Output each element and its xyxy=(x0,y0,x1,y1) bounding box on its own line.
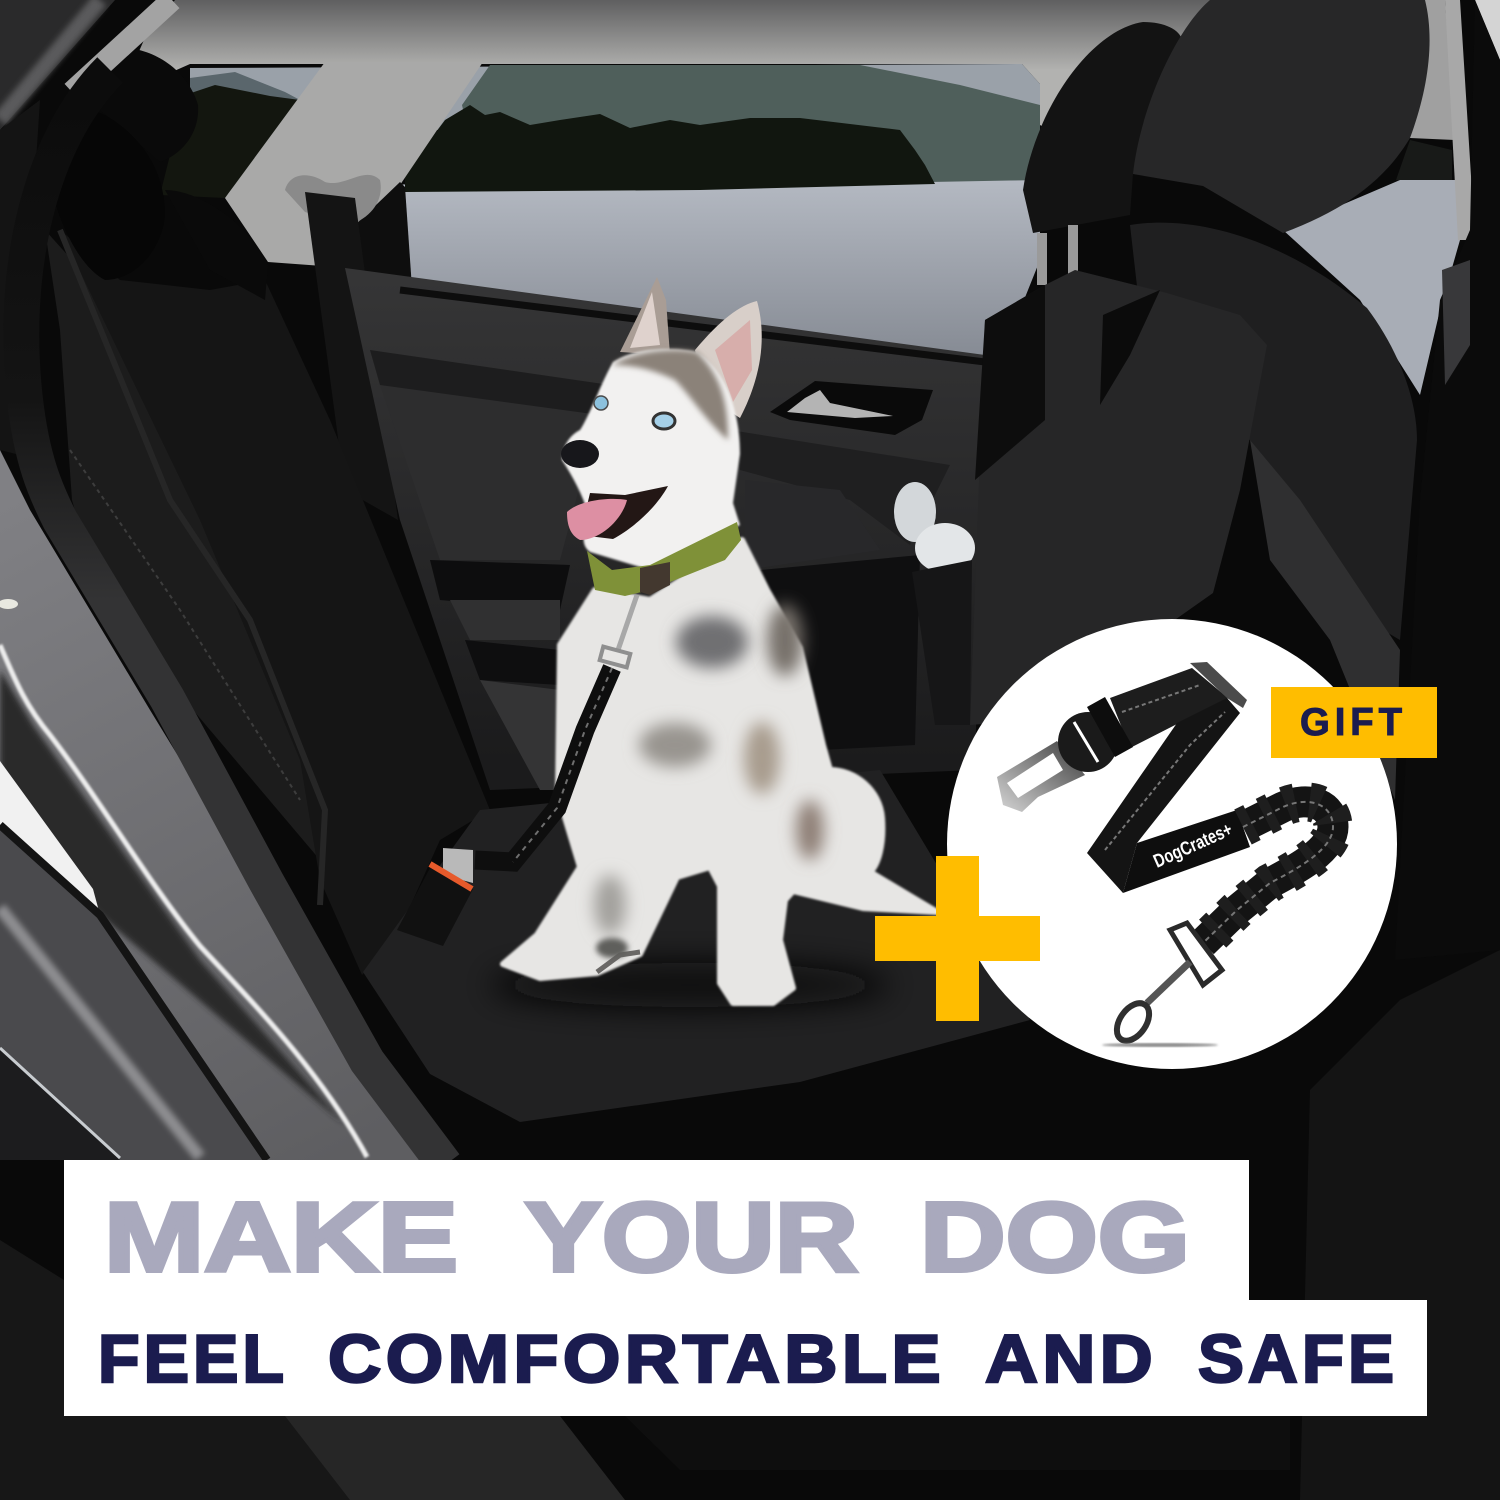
mouth xyxy=(580,486,668,539)
clip slot xyxy=(1074,722,1098,762)
right ear inner xyxy=(715,320,752,402)
headline line one: YOUR xyxy=(525,1182,858,1292)
left ear xyxy=(620,277,670,355)
painted door sill xyxy=(0,450,425,1160)
rubber seal xyxy=(21,70,445,1165)
far right headrest xyxy=(1023,22,1182,233)
strap logo section xyxy=(1123,810,1250,893)
sky xyxy=(190,64,1040,130)
headline line two: SAFE xyxy=(1198,1321,1398,1397)
cover pocket xyxy=(912,560,972,725)
snap hook ring xyxy=(1170,923,1222,985)
highlight two xyxy=(0,761,100,915)
small highlight xyxy=(0,599,18,609)
stitching diagonal xyxy=(1105,712,1225,850)
tree line xyxy=(405,105,935,192)
rear window scene xyxy=(160,64,1040,360)
headline line two: COMFORTABLE xyxy=(328,1321,945,1397)
headline line one xyxy=(104,1182,1190,1292)
right seat cushion strip xyxy=(1250,440,1400,800)
strap upper section xyxy=(1110,668,1228,748)
seat stitching xyxy=(70,450,300,800)
seat buckle xyxy=(397,848,473,946)
seat belt clip tongue xyxy=(997,741,1085,812)
left window mountain xyxy=(190,72,300,130)
logo: DogCrates+ xyxy=(1150,819,1236,873)
right headrests xyxy=(1023,22,1182,285)
headline line one: MAKE xyxy=(104,1182,458,1292)
seat belt clip head xyxy=(1058,712,1118,772)
left ear inner xyxy=(630,292,660,348)
headline line one: DOG xyxy=(920,1182,1190,1292)
door handle xyxy=(770,381,933,435)
right tree line xyxy=(1396,140,1452,180)
rope toy xyxy=(894,482,975,573)
eye left xyxy=(594,396,608,410)
highlight one xyxy=(0,645,367,1157)
headline line two: AND xyxy=(985,1321,1157,1397)
left door frame xyxy=(0,0,445,1165)
near right headrest xyxy=(1133,0,1430,233)
strap diagonal section xyxy=(1087,698,1240,893)
far headrest xyxy=(95,48,198,162)
eye right xyxy=(653,413,675,429)
body xyxy=(503,540,937,1003)
mountains xyxy=(462,65,1040,182)
plus sign xyxy=(875,856,1040,1021)
head xyxy=(562,349,740,570)
dog leash xyxy=(475,595,637,862)
seat belt anchor xyxy=(285,175,381,225)
headline line two: FEEL xyxy=(98,1321,288,1397)
hammock seat cover floor xyxy=(363,770,1030,1122)
strap keeper xyxy=(1087,697,1133,757)
nose xyxy=(561,440,599,468)
bottom headline banner xyxy=(64,1160,1427,1416)
forehead marking xyxy=(612,350,728,440)
paw separation xyxy=(597,952,640,972)
upper left frame xyxy=(0,0,115,130)
tongue xyxy=(567,499,627,540)
snap hook xyxy=(1110,962,1190,1047)
window pillar with seat belt anchor xyxy=(225,62,483,520)
right seat back xyxy=(1130,223,1417,640)
chest shading xyxy=(676,616,748,668)
collar xyxy=(587,522,741,596)
lake xyxy=(190,180,1040,360)
stitching xyxy=(1122,685,1200,712)
rear door panel xyxy=(345,268,985,790)
lower cabin shapes xyxy=(0,950,1500,1500)
gift badge: GIFT xyxy=(1300,701,1407,744)
bungee folds xyxy=(1203,802,1333,943)
gift badge xyxy=(1271,687,1437,758)
window sill line xyxy=(400,290,985,362)
dark band xyxy=(0,670,345,1125)
dog shadow xyxy=(490,963,890,1007)
right roof corner xyxy=(1410,0,1455,140)
far seat shoulder xyxy=(165,190,268,300)
left window trees xyxy=(160,85,300,198)
strap buckle xyxy=(1190,662,1247,708)
bungee stitching xyxy=(1203,802,1333,943)
dog xyxy=(475,277,937,1007)
chrome posts xyxy=(1037,233,1047,285)
white product circle xyxy=(947,619,1397,1069)
headline line two xyxy=(98,1321,1398,1397)
hammock edge xyxy=(60,230,325,905)
rear right window, lake xyxy=(1283,180,1460,395)
right door pillar xyxy=(1395,0,1500,960)
bungee xyxy=(1203,802,1333,943)
hanging seat cover xyxy=(970,270,1267,725)
lower panel xyxy=(0,830,262,1160)
car roof lining xyxy=(120,0,1225,160)
seat belt xyxy=(305,192,398,520)
collar buckle xyxy=(640,562,670,595)
near headrest xyxy=(45,111,165,280)
product shadow xyxy=(1102,1043,1218,1047)
right ear xyxy=(695,301,762,418)
black strap xyxy=(1100,290,1160,405)
left headrests and seat with hammock cover xyxy=(45,48,490,975)
left strap xyxy=(975,285,1045,480)
